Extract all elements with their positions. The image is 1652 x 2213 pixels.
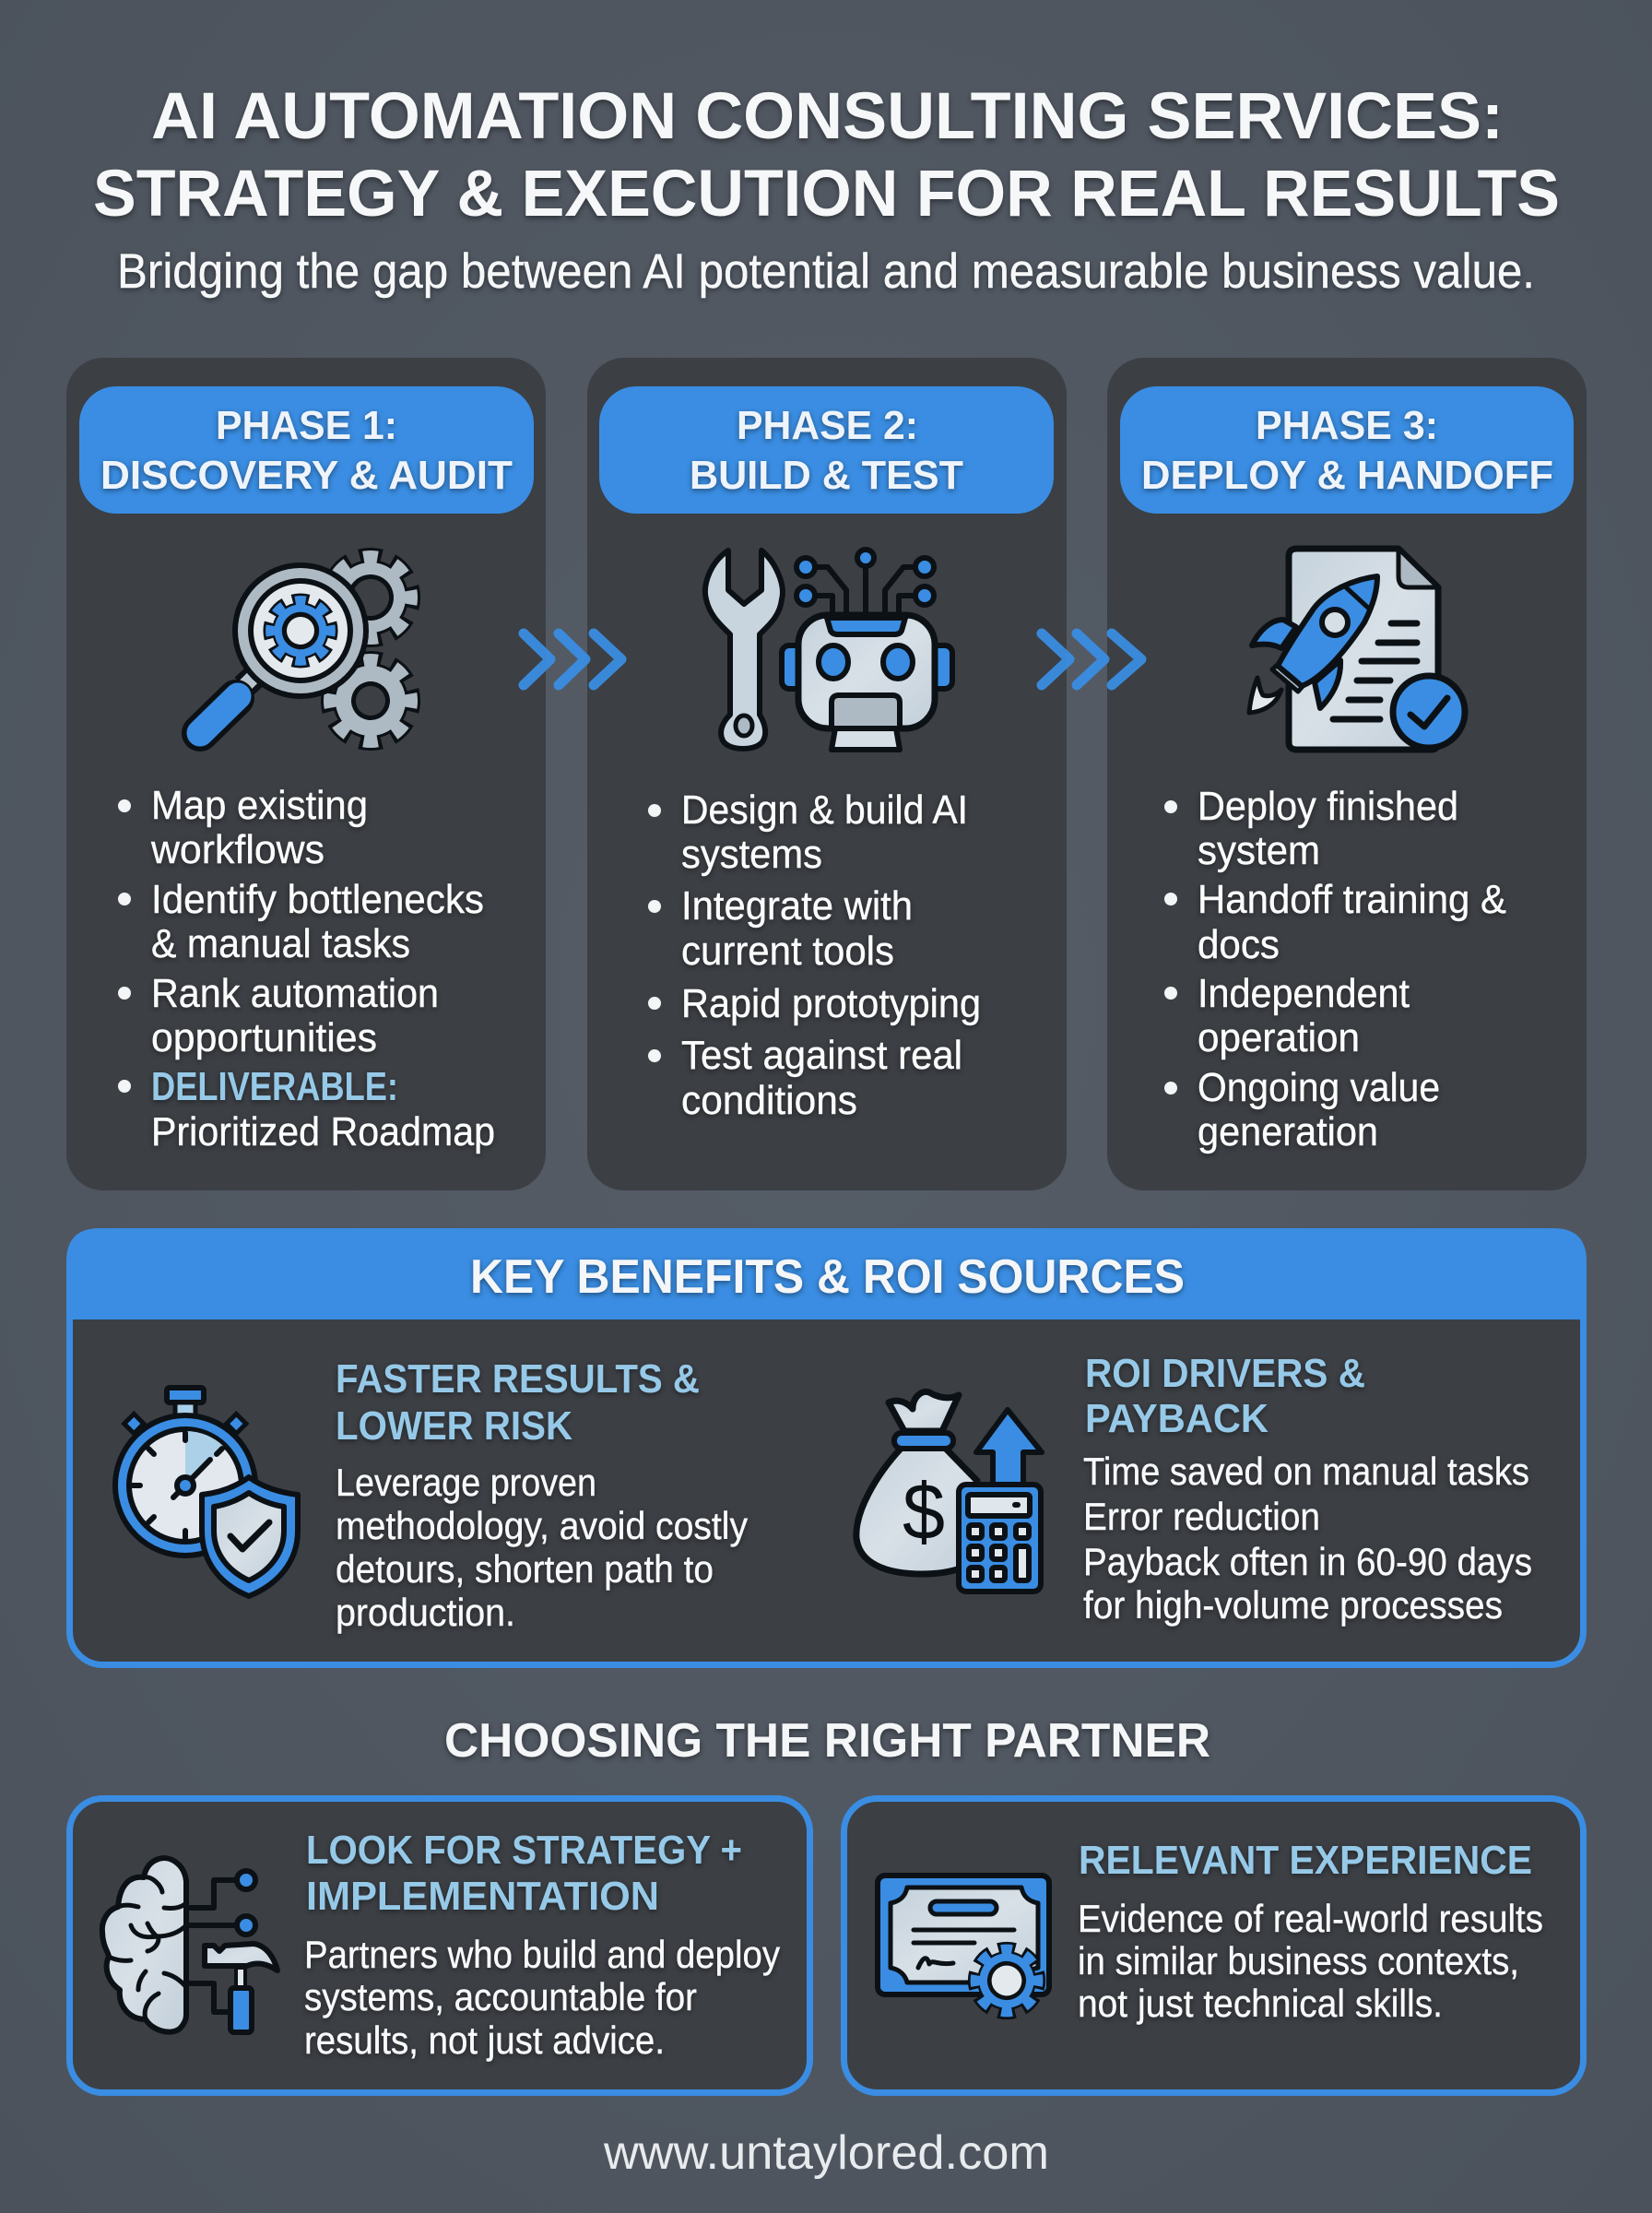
panel: phase 3	[1107, 358, 1587, 1190]
card text: relevant experience	[1078, 1838, 1543, 2025]
phase 1 bullets	[118, 783, 495, 1154]
phase 3 bullets: operation	[1198, 1015, 1360, 1060]
phase 3 bullets: Deploy finished	[1198, 784, 1458, 829]
phase 3 bullets: generation	[1198, 1109, 1378, 1154]
benefit: faster results: LOWER RISK	[336, 1403, 572, 1449]
icon: brain and hammer	[102, 1858, 277, 2032]
arrow: phase 1 to phase 2	[524, 633, 621, 685]
phase 3 bullets: system	[1198, 828, 1320, 873]
phase 1 header	[79, 386, 534, 514]
benefit: faster results: Leverage proven	[336, 1461, 596, 1504]
icon: magnifier and gears	[200, 548, 420, 751]
icon: certificate and gear	[878, 1876, 1049, 2019]
arrow: phase 2 to phase 3	[1042, 633, 1141, 685]
phase 1 bullets: DELIVERABLE:	[151, 1064, 398, 1109]
benefit: faster results: detours, shorten path to	[336, 1547, 714, 1591]
benefit: ROI drivers: ROI DRIVERS &	[1085, 1351, 1365, 1396]
benefit: ROI drivers: PAYBACK	[1085, 1396, 1268, 1441]
phase 3 bullets: Handoff training &	[1198, 877, 1506, 922]
title: AI AUTOMATION CONSULTING SERVICES:	[151, 80, 1504, 153]
phase 2 bullets: systems	[681, 832, 822, 877]
phase 2 bullets: Integrate with	[681, 883, 913, 929]
panel: phase 1	[66, 358, 546, 1190]
phase 2 header: BUILD & TEST	[690, 453, 963, 498]
panel: phase 2	[587, 358, 1067, 1190]
card text: relevant experience: in similar business contexts,	[1078, 1939, 1519, 1982]
card text: strategy and implementation: IMPLEMENTATION	[306, 1874, 659, 1919]
panel: key benefits and ROI	[66, 1228, 1587, 1665]
phase 2 bullets: Test against real	[681, 1033, 962, 1078]
phase 3 header: PHASE 3:	[1256, 403, 1438, 448]
phase 3 bullets: docs	[1198, 922, 1280, 967]
benefit: ROI drivers: Payback often in 60-90 days	[1083, 1540, 1532, 1583]
phase 1 bullets: Map existing	[151, 783, 368, 828]
benefit: faster results: methodology, avoid costly	[336, 1504, 748, 1547]
card text: relevant experience: RELEVANT EXPERIENCE	[1079, 1838, 1532, 1883]
heading: choosing the right partner: CHOOSING THE RIGHT PARTNER	[444, 1714, 1210, 1768]
phase 3 header: DEPLOY & HANDOFF	[1141, 453, 1553, 498]
phase 1 bullets: Prioritized Roadmap	[151, 1109, 495, 1154]
phase 2 bullets	[648, 787, 981, 1123]
icon: rocket document	[1249, 549, 1465, 750]
benefit: faster results: FASTER RESULTS &	[336, 1356, 700, 1402]
benefits header band	[66, 1228, 1587, 1320]
card text: relevant experience: Evidence of real-world results	[1078, 1897, 1543, 1940]
card text: strategy and implementation: results, not just advice.	[304, 2018, 665, 2062]
footer url: www.untaylored.com	[603, 2126, 1049, 2180]
card text: strategy and implementation: LOOK FOR STRATEGY +	[306, 1828, 742, 1873]
phase 1 bullets: Rank automation	[151, 971, 439, 1016]
phase 2 bullets: Rapid prototyping	[681, 981, 981, 1026]
phase 3 header	[1120, 386, 1574, 514]
benefit: ROI drivers	[1083, 1351, 1532, 1627]
phase 1 header: DISCOVERY & AUDIT	[100, 453, 513, 498]
phase 2 header: PHASE 2:	[737, 403, 918, 448]
phase 1 bullets: workflows	[150, 827, 324, 872]
benefits header band: KEY BENEFITS & ROI SOURCES	[470, 1250, 1185, 1304]
icon: money bag and calculator	[856, 1391, 1042, 1592]
phase 2 bullets: current tools	[681, 929, 894, 974]
card: strategy and implementation	[70, 1798, 809, 2093]
benefit: ROI drivers: for high-volume processes	[1083, 1583, 1503, 1627]
benefit: ROI drivers: Time saved on manual tasks	[1083, 1450, 1529, 1493]
card text: relevant experience: not just technical skills.	[1078, 1982, 1443, 2025]
icon: stopwatch and shield	[115, 1388, 298, 1596]
benefit: faster results	[336, 1356, 748, 1634]
phase 3 bullets: Independent	[1198, 971, 1410, 1016]
benefit: ROI drivers: Error reduction	[1083, 1495, 1320, 1538]
title: STRATEGY & EXECUTION FOR REAL RESULTS	[93, 158, 1560, 231]
card text: strategy and implementation	[304, 1828, 780, 2062]
phase 3 bullets: Ongoing value	[1198, 1065, 1440, 1110]
icon: wrench and robot	[705, 550, 952, 750]
phase 1 bullets: opportunities	[151, 1015, 377, 1060]
phase 1 bullets: & manual tasks	[151, 921, 410, 966]
benefit: faster results: production.	[336, 1591, 515, 1634]
card text: strategy and implementation: Partners who build and deploy	[304, 1933, 780, 1976]
card: relevant experience	[844, 1798, 1584, 2093]
phase 2 bullets: Design & build AI	[681, 787, 968, 833]
card text: strategy and implementation: systems, accountable for	[304, 1975, 697, 2018]
phase 1 header: PHASE 1:	[216, 403, 397, 448]
phase 2 bullets: conditions	[681, 1078, 857, 1123]
phase 2 header	[599, 386, 1054, 514]
phase 3 bullets	[1164, 784, 1506, 1154]
phase 1 bullets: Identify bottlenecks	[151, 877, 484, 922]
title	[93, 80, 1560, 231]
subtitle: Bridging the gap between AI potential and measurable business value.	[117, 244, 1535, 299]
icon: money bag and calculator: $	[903, 1468, 945, 1556]
